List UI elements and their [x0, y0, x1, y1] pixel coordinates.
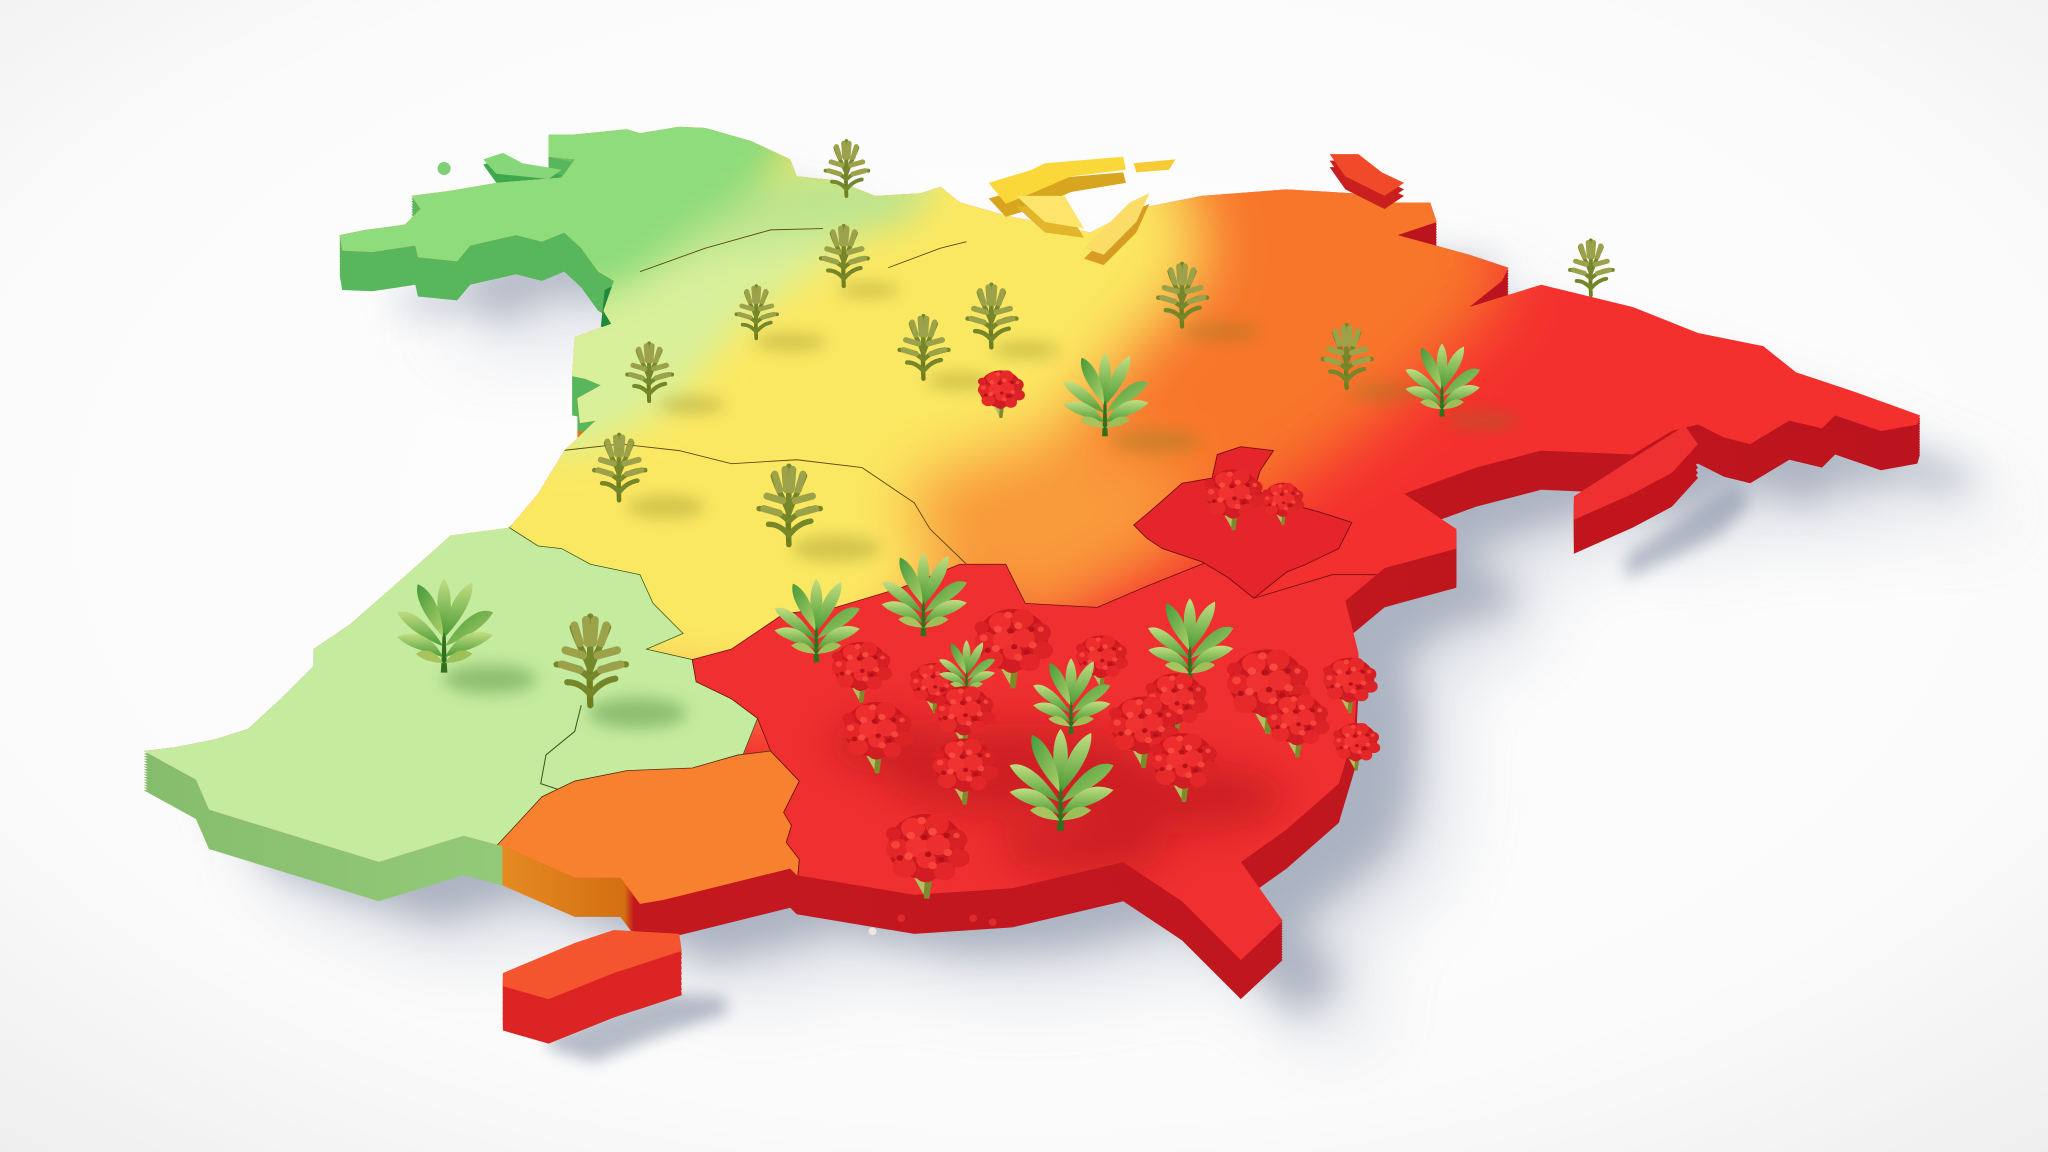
tree: [900, 316, 949, 379]
tree: [1323, 325, 1372, 388]
red tree: [1204, 469, 1264, 530]
cast shadows: [202, 187, 2011, 1062]
red tree: [1145, 673, 1208, 737]
ground shading among trees: [829, 716, 1287, 875]
tree: [1405, 344, 1480, 417]
tree: [759, 466, 820, 545]
islands: northern yellow arcs: [989, 157, 1176, 265]
tree: [627, 344, 672, 401]
tree: [557, 616, 626, 705]
red tree: [935, 686, 995, 747]
red tree: [1333, 723, 1380, 771]
red tree: [886, 814, 970, 899]
region: central red patch: [1134, 447, 1352, 598]
palm: [775, 579, 860, 662]
map top surface: [144, 126, 1920, 960]
trees: north: [594, 141, 1613, 545]
palm: [397, 579, 493, 673]
palm: [1033, 658, 1110, 734]
tree: [821, 226, 868, 286]
palm: [1148, 598, 1233, 682]
region: south red: [692, 562, 1384, 973]
palm: [882, 552, 967, 636]
region borders: yellow zone: [509, 229, 967, 564]
red tree: [1323, 658, 1378, 713]
north-west arm details: [438, 135, 643, 332]
base colour gradient zones: [144, 126, 1920, 960]
region: south orange: [497, 750, 799, 904]
palm: [1063, 353, 1148, 436]
island: north-east peninsula: [1330, 154, 1404, 209]
tree: [826, 141, 868, 196]
island: southern red: [503, 930, 682, 1044]
red tree: [1109, 697, 1180, 768]
map extrusion: side walls: [144, 129, 1920, 999]
tree: [1158, 264, 1207, 327]
SW internal border: [541, 705, 581, 794]
red tree: [832, 642, 892, 703]
red tree: [978, 370, 1025, 418]
trees: south-west: [397, 579, 626, 705]
trees: southern red cluster: [775, 552, 1380, 899]
subtle ground shadows on yellow zone: [627, 282, 1519, 562]
tree: [594, 435, 645, 500]
tree: [968, 285, 1016, 347]
red tree: [1076, 635, 1128, 688]
dark bay walls on the north-west coast: [516, 225, 598, 272]
red tree: [975, 609, 1053, 688]
region: south-west light green: [144, 527, 758, 862]
coastal fragments: [601, 272, 643, 332]
red tree: [1151, 733, 1219, 802]
tree: [1570, 240, 1613, 295]
red tree: [842, 702, 913, 773]
red tree: [933, 738, 998, 805]
red tree: [1263, 483, 1304, 525]
red tree: [1267, 694, 1330, 758]
palm: [1010, 729, 1114, 831]
island: eastern red peninsula: [1574, 426, 1698, 554]
red tree: [910, 663, 960, 713]
small offshore islets: [869, 914, 997, 935]
red tree: [1227, 649, 1310, 734]
palm: [939, 640, 995, 695]
tree: [736, 286, 777, 338]
shadow spots on light green: [443, 665, 687, 729]
